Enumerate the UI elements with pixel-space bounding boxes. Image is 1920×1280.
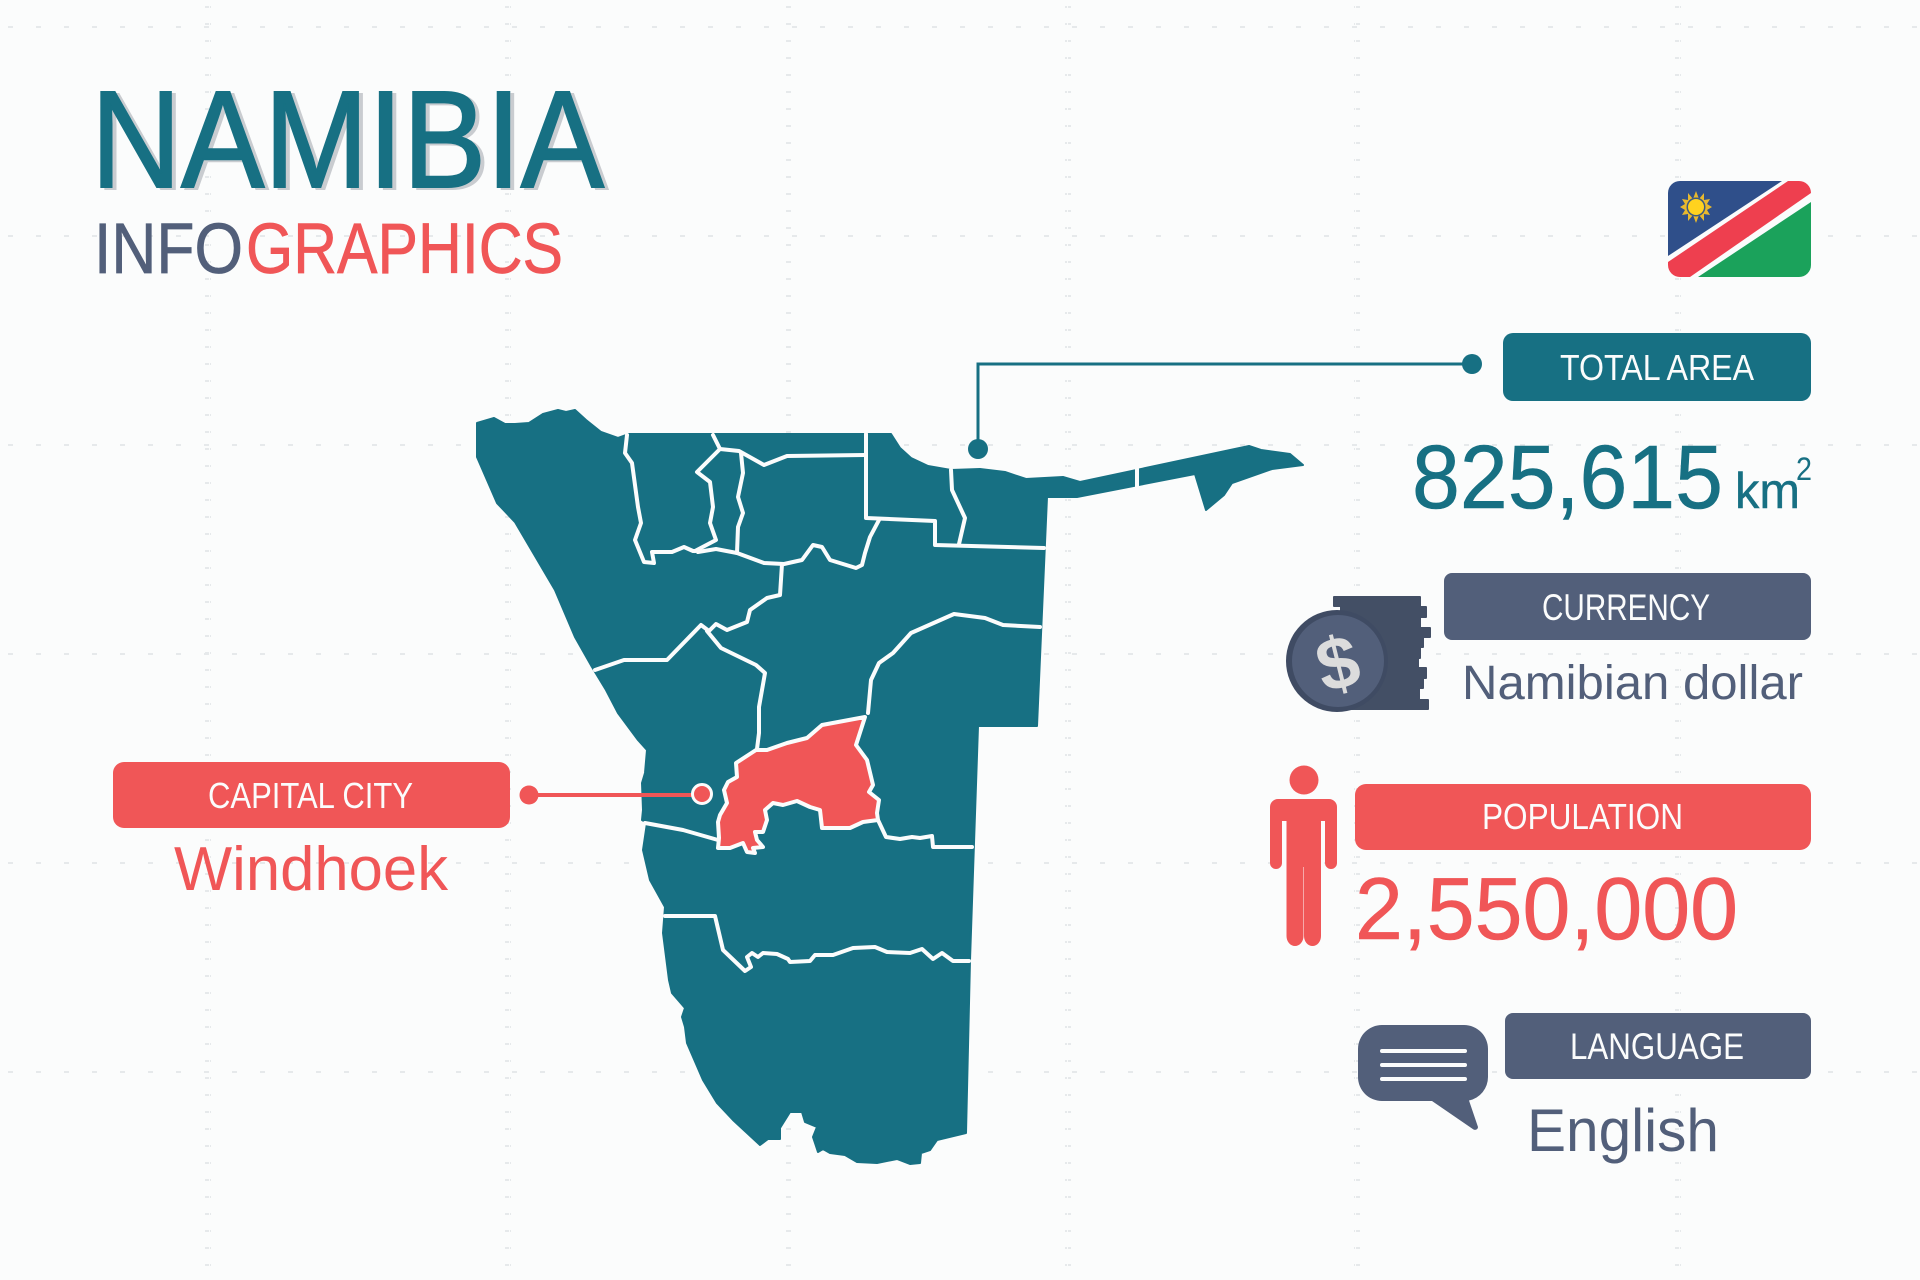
title: NAMIBIA: NAMIBIA [95, 65, 608, 219]
language value: English [1527, 1097, 1719, 1164]
callout connector: capital city [520, 784, 712, 804]
total area value: 2 [1796, 451, 1812, 487]
icon: Namibia flag [1668, 181, 1811, 277]
population label [1355, 784, 1811, 850]
total area label: TOTAL AREA [1560, 347, 1754, 388]
language label [1505, 1013, 1811, 1079]
currency label: CURRENCY [1542, 587, 1710, 628]
total area label [1503, 333, 1811, 401]
subtitle: INFOGRAPHICS: INFO [94, 210, 243, 289]
currency label [1444, 573, 1811, 640]
total area value: 825,615 [1412, 428, 1723, 528]
subtitle: INFOGRAPHICS [94, 210, 563, 289]
capital city value: Windhoek [174, 835, 449, 904]
title: NAMIBIA: NAMIBIA [91, 63, 604, 217]
icon: speech bubble [1358, 1025, 1488, 1130]
icon: coin stack [1286, 596, 1431, 712]
map of Namibia [477, 410, 1303, 1164]
map: country outline [477, 410, 1303, 1164]
capital city label [113, 762, 510, 828]
capital city label: CAPITAL CITY [208, 775, 413, 816]
icon: coin stack: $ [1308, 618, 1368, 709]
callout connector: total area [968, 354, 1482, 459]
total area value: km [1735, 463, 1800, 519]
language label: LANGUAGE [1570, 1026, 1744, 1067]
map: Windhoek capital region [718, 717, 879, 853]
map: region borders [595, 434, 1137, 971]
population label: POPULATION [1482, 796, 1683, 837]
icon: person [1270, 766, 1337, 946]
subtitle: INFOGRAPHICS: GRAPHICS [246, 210, 563, 289]
population value: 2,550,000 [1355, 859, 1738, 958]
currency value: Namibian dollar [1462, 657, 1803, 710]
